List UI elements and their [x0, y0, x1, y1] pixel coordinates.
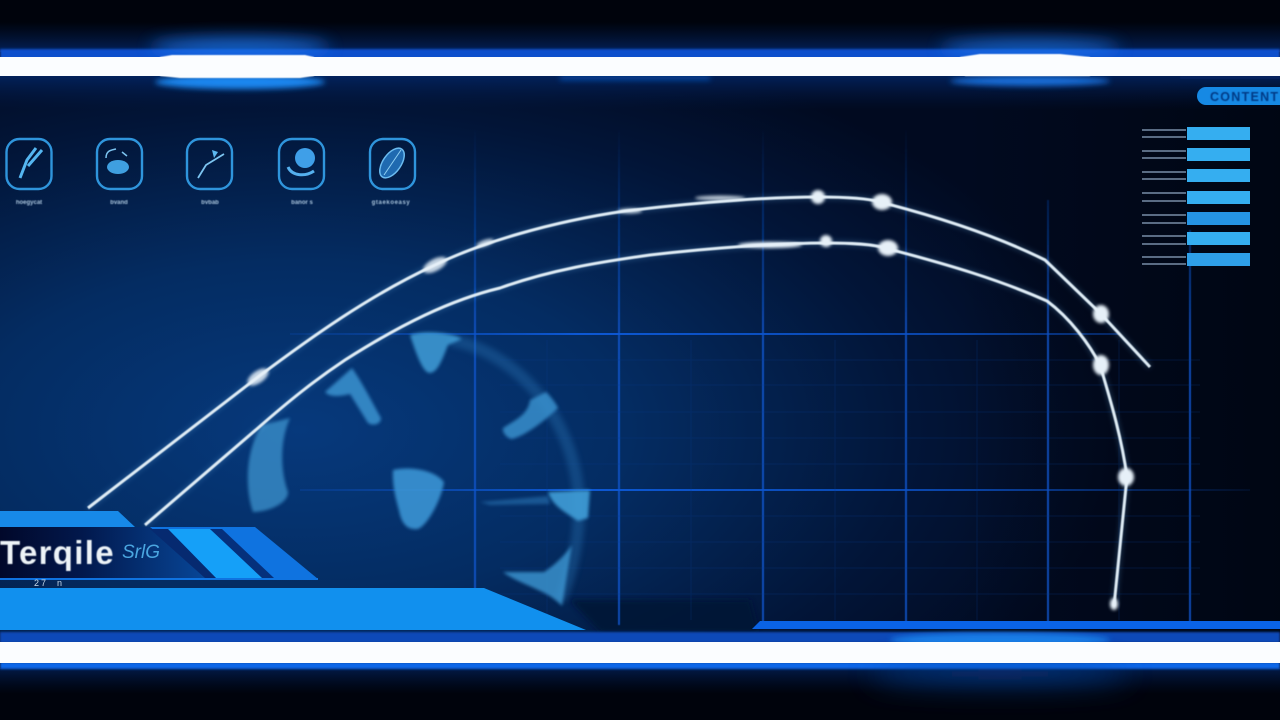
- banner title: Terqile: [0, 534, 115, 571]
- torque curve upper: [88, 197, 1150, 508]
- bottom light bar: [0, 632, 1280, 720]
- gauge dial: [248, 332, 590, 606]
- icon captions: gtaekoeasy: [372, 200, 410, 206]
- lower centre dark shape: [570, 600, 758, 632]
- top right tag: CONTENT: [1210, 90, 1278, 104]
- banner title: SrlG: [122, 542, 160, 563]
- curve markers: [245, 190, 1134, 610]
- icon captions: [16, 200, 410, 206]
- icon captions: hoegycat: [16, 200, 42, 206]
- icon 4: [279, 139, 324, 189]
- icon 3: [187, 139, 232, 189]
- banner small text: 27 n: [34, 578, 64, 588]
- icon captions: bvand: [110, 200, 128, 206]
- icon captions: bvbab: [201, 200, 219, 206]
- spec bars: [1142, 127, 1250, 266]
- lower left banner: [0, 511, 586, 630]
- icon 2: [97, 139, 142, 189]
- curve glow: [88, 197, 1150, 606]
- icon captions: banor s: [291, 200, 313, 206]
- lower right accent bar: [752, 621, 1280, 629]
- grid lines: [290, 130, 1250, 625]
- banner title: [0, 534, 160, 572]
- icon 1: [6, 139, 52, 189]
- torque curve lower: [145, 243, 1127, 606]
- top right tag: [1197, 87, 1280, 105]
- icon 5: [370, 139, 415, 189]
- top light bar: [0, 0, 1280, 110]
- icon row: [6, 139, 415, 189]
